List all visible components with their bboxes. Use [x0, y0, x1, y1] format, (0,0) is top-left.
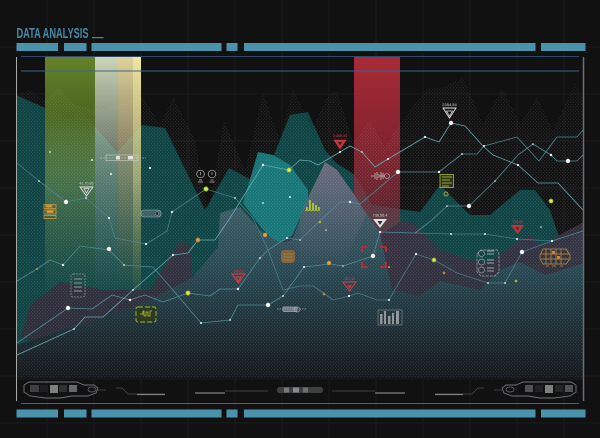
icon: capsule gauge [141, 210, 161, 217]
marker: value 41,76,86 [80, 182, 94, 196]
dot matrix surface [16, 78, 583, 378]
icon: triple dial panel [477, 250, 499, 276]
bottom bar strip [16, 410, 586, 418]
marker: red right: 736,46 [512, 220, 523, 224]
marker: value 736,56,4 [373, 214, 387, 228]
marker: red centre: 392,45 [344, 277, 355, 281]
marker: value 2354,54 [442, 102, 458, 118]
title: DATA ANALYSIS [16, 25, 88, 42]
marker: value 41,76,86: 41,76,86 [80, 182, 94, 186]
slate wave layer [16, 162, 584, 380]
frame lines [16, 56, 584, 404]
icon: twin dials [197, 170, 216, 182]
icon: small ship [277, 307, 306, 312]
bottom centre connector [277, 387, 323, 393]
bottom left console [24, 382, 268, 398]
icon: waveform with circle [371, 172, 390, 180]
marker: red left: 746,12 [233, 270, 244, 274]
marker: red value 3,456,43 [333, 134, 347, 149]
bottom right console [332, 382, 576, 398]
marker: value 2354,54: 2354,54 [442, 102, 458, 107]
top bar strip [16, 43, 586, 51]
data nodes: white [38, 121, 570, 330]
target reticle [362, 247, 386, 267]
purple wave layer [20, 200, 584, 340]
highlight columns [45, 56, 400, 316]
marker: red right [511, 220, 524, 234]
data nodes: yellow [186, 168, 553, 295]
icon: orange data block [281, 250, 295, 263]
icon: yellow list panel [440, 174, 454, 196]
icon: yellow waveform badge [136, 307, 156, 322]
data lines [17, 123, 583, 355]
data nodes: orange [36, 233, 445, 295]
icon: orange grid panel [540, 249, 570, 266]
icon: horizontal gauge bar top [100, 155, 146, 160]
icon: grey equaliser panel [378, 310, 402, 325]
pink peak tint [300, 162, 366, 270]
marker: red value 3,456,43: 3,456,43 [333, 134, 347, 138]
icon: orange stacked panel [44, 204, 56, 218]
icon: grey stack panel [71, 274, 85, 297]
marker: red left [232, 270, 245, 283]
marker: value 736,56,4: 736,56,4 [373, 214, 387, 218]
dark area teal mountains [16, 95, 584, 350]
icon: yellow bar chart [305, 200, 320, 211]
marker: red centre [343, 277, 356, 291]
